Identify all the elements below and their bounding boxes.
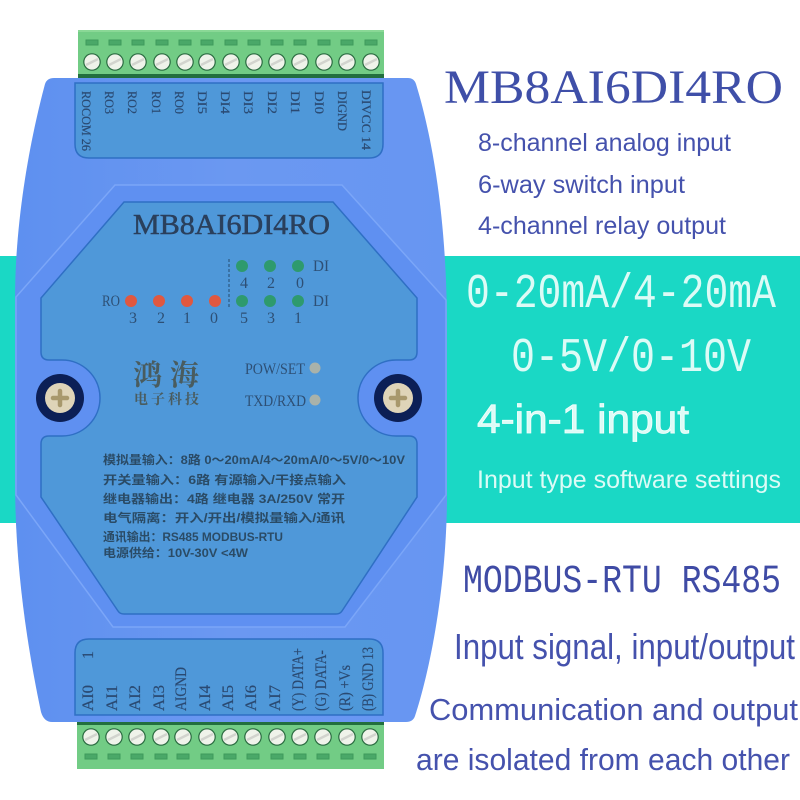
bottom pin labels: (Y) DATA+ <box>290 648 307 711</box>
top pin labels: DI1 <box>288 91 302 114</box>
feature list: 6-way switch input <box>478 171 685 199</box>
feature list <box>478 129 731 240</box>
specification text: 继电器输出：4路 继电器 3A/250V 常开 <box>103 491 345 506</box>
digital input LEDs: 4 <box>240 275 248 292</box>
bottom pin labels: AI7 <box>267 685 284 711</box>
input ranges on teal band: 0-5V/0-10V <box>511 332 751 386</box>
isolation notes <box>416 626 798 777</box>
digital input LEDs: 3 <box>267 310 275 327</box>
bottom pin labels: AIGND <box>173 667 190 711</box>
relay output LEDs <box>102 293 221 327</box>
digital input LEDs <box>236 258 329 327</box>
input ranges on teal band <box>466 268 781 494</box>
bottom pin labels: AI2 <box>127 685 144 711</box>
specification text <box>103 452 405 560</box>
specification text: 开关量输入：6路 有源输入/干接点输入 <box>103 472 346 487</box>
top pin labels: DI3 <box>241 91 255 114</box>
digital input LEDs: DI <box>313 293 329 310</box>
top pin labels <box>79 90 373 151</box>
digital input LEDs: 2 <box>267 275 275 292</box>
bottom pin labels: AI5 <box>220 685 237 711</box>
relay output LEDs: 1 <box>183 310 191 327</box>
mounting screw right <box>374 374 422 422</box>
device: din-rail module <box>15 30 447 769</box>
teal band <box>0 256 800 523</box>
specification text: 通讯输出：RS485 MODBUS-RTU <box>103 529 283 544</box>
status LEDs <box>102 258 329 327</box>
specification text: 模拟量输入：8路 0～20mA/4～20mA/0～5V/0～10V <box>103 452 405 467</box>
specification text: 电气隔离：开入/开出/模拟量输入/通讯 <box>103 510 345 525</box>
relay output LEDs: 0 <box>210 310 218 327</box>
top pin labels: DIVCC 14 <box>359 90 373 151</box>
digital input LEDs: 0 <box>296 275 304 292</box>
bottom pin labels: AI0 <box>80 685 97 711</box>
raised lid outline <box>16 185 446 627</box>
input ranges on teal band: 4-in-1 input <box>477 396 690 442</box>
top pin labels: DI4 <box>218 91 232 115</box>
bottom connector label panel <box>75 639 383 715</box>
mounting screw left <box>36 374 84 422</box>
top pin labels: RO2 <box>125 91 139 114</box>
top pin labels: ROCOM 26 <box>79 91 93 151</box>
bottom pin labels: AI4 <box>197 685 214 711</box>
bottom pin labels: AI6 <box>243 685 260 711</box>
product title: MB8AI6DI4RO <box>444 61 783 114</box>
power and comms indicators: POW/SET <box>245 361 305 378</box>
top pin labels: DI2 <box>265 91 279 114</box>
relay output LEDs: 2 <box>157 310 165 327</box>
top pin labels: RO3 <box>102 91 116 114</box>
top pin labels: RO0 <box>172 91 186 114</box>
bottom terminal block <box>77 722 384 769</box>
bottom pin labels: AI3 <box>151 685 168 711</box>
brand logo: 电子科技 <box>134 391 199 408</box>
power and comms indicators <box>245 361 320 410</box>
input ranges on teal band: Input type software settings <box>477 466 781 494</box>
device model name: MB8AI6DI4RO <box>133 210 330 241</box>
bottom pin labels: (B) GND 13 <box>360 647 377 711</box>
lid panel <box>41 202 417 614</box>
bottom pin labels: AI1 <box>104 685 121 711</box>
power and comms indicators: TXD/RXD <box>245 393 306 410</box>
relay output LEDs: 3 <box>129 310 137 327</box>
top pin labels: DIGND <box>335 91 349 131</box>
top connector label panel <box>75 83 383 158</box>
top pin labels: RO1 <box>149 91 163 114</box>
device body <box>15 78 447 722</box>
top pin labels: DI5 <box>195 91 209 114</box>
relay output LEDs: RO <box>102 293 120 310</box>
digital input LEDs: 5 <box>240 310 248 327</box>
bottom pin labels: (R) +Vs <box>337 665 354 711</box>
top pin labels: DI0 <box>312 91 326 114</box>
bottom pin labels: 1 <box>80 651 97 659</box>
feature list: 4-channel relay output <box>478 212 726 240</box>
bottom pin labels <box>80 647 377 711</box>
digital input LEDs: DI <box>313 258 329 275</box>
isolation notes: are isolated from each other <box>416 742 790 777</box>
isolation notes: Communication and output <box>429 692 798 727</box>
brand logo: 鸿 <box>133 359 162 392</box>
feature list: 8-channel analog input <box>478 129 731 157</box>
bottom pin labels: (G) DATA- <box>313 650 330 711</box>
top terminal block <box>78 30 384 78</box>
specification text: 电源供给：10V-30V <4W <box>103 545 249 560</box>
brand logo: 海 <box>170 359 199 392</box>
digital input LEDs: 1 <box>294 310 302 327</box>
brand logo <box>133 359 199 408</box>
